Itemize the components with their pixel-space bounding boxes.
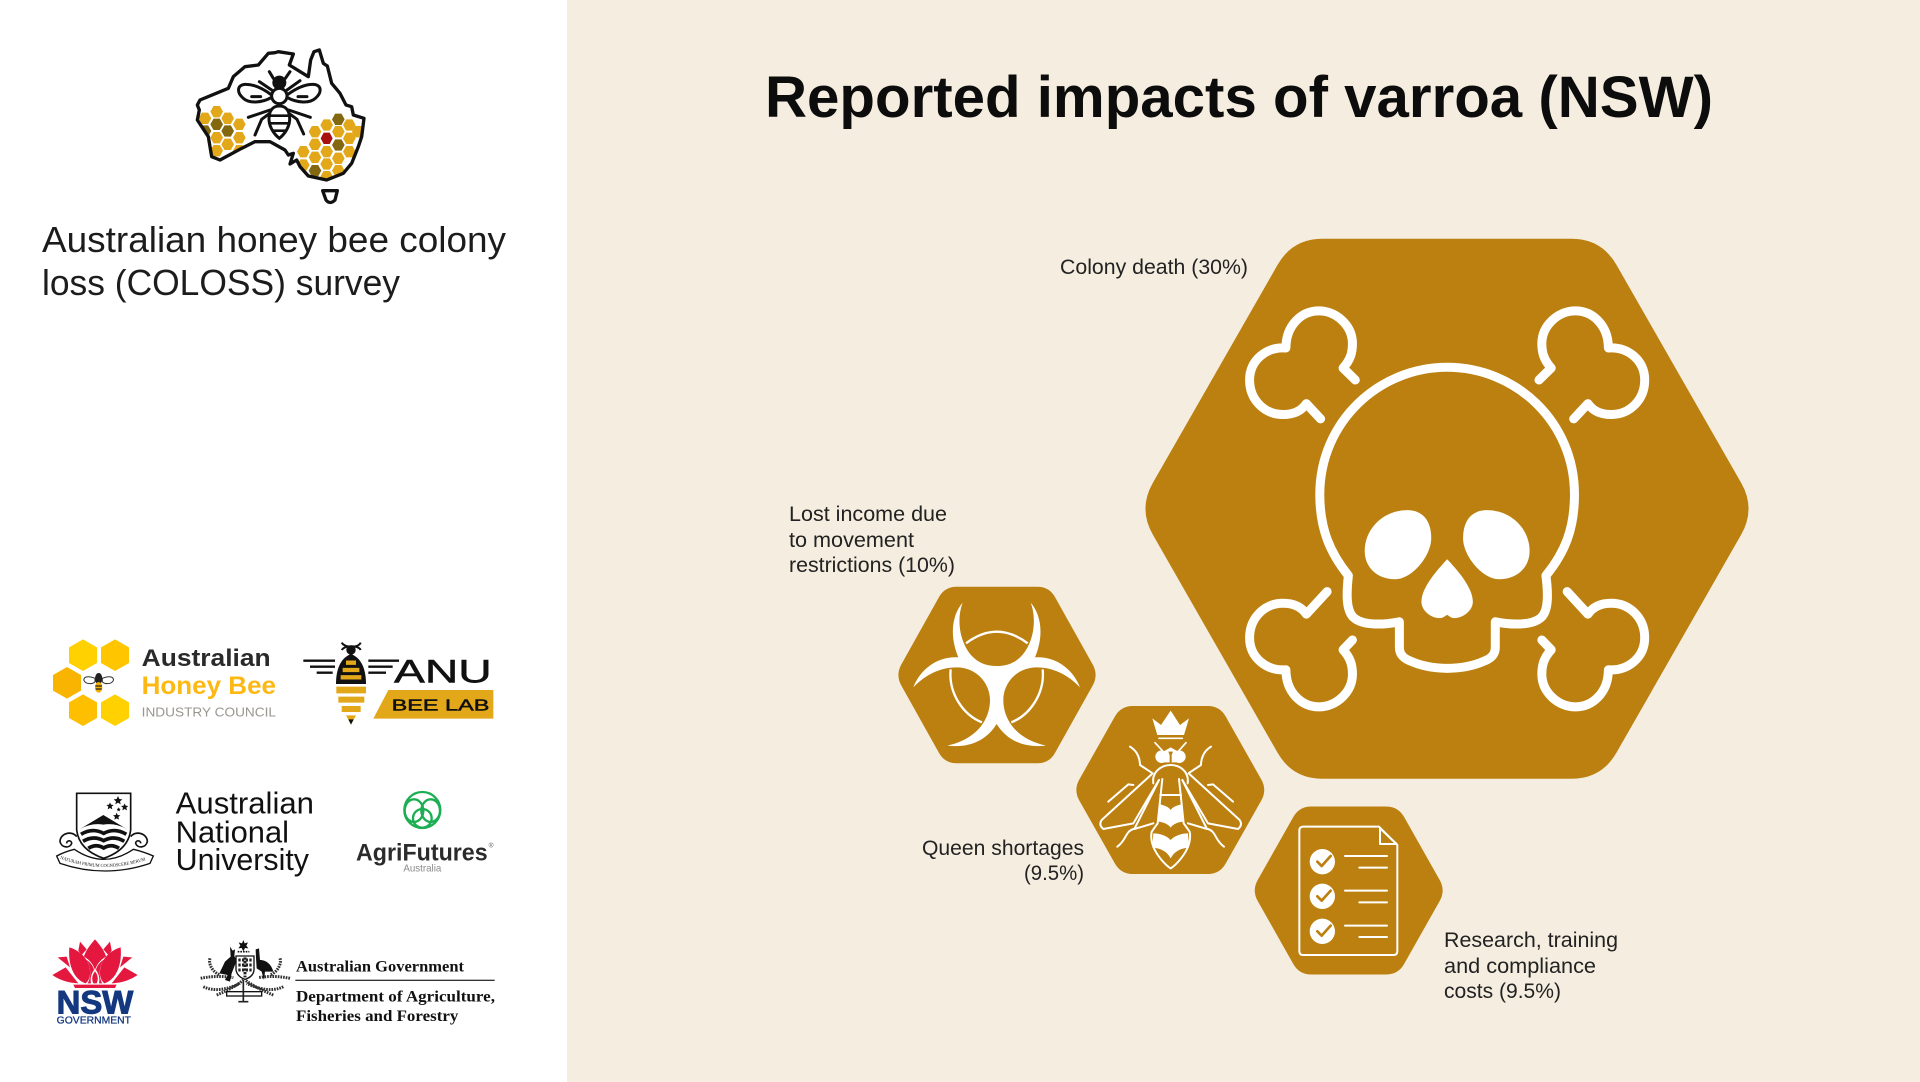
text: department name: Fisheries and Forestry xyxy=(296,1008,458,1025)
logo: Australian Honey Bee Industry Council xyxy=(53,639,276,726)
panel: left sidebar xyxy=(0,0,567,1082)
panel: queen shortages hexagon with queen bee xyxy=(1076,706,1264,874)
label: colony death: Colony death (30%) xyxy=(1060,256,1248,279)
text: department name xyxy=(295,959,495,1025)
icon: ANU crest: NATURAM PRIMUM COGNOSCERE RERUM xyxy=(60,856,146,867)
label: lost income: restrictions (10%) xyxy=(789,554,955,577)
logo: Australian Government Department of Agriculture, Fisheries and Forestry xyxy=(201,940,495,1025)
icon: skull and crossbones xyxy=(1250,311,1645,707)
text: department name: Department of Agriculture, xyxy=(296,989,495,1006)
heading: survey name: loss (COLOSS) survey xyxy=(42,262,400,303)
label: research, training and compliance costs: and compliance xyxy=(1444,955,1596,978)
logo: AgriFutures Australia: AgriFutures xyxy=(356,840,488,867)
label: research, training and compliance costs: Research, training xyxy=(1444,929,1618,952)
label: lost income xyxy=(789,503,955,577)
logo: ANU Bee Lab xyxy=(303,643,493,725)
logo: Australian National University xyxy=(56,786,314,877)
text: university name: Australian xyxy=(176,786,314,820)
text: university name: University xyxy=(176,843,310,877)
icon: Australia map with bee and honeycomb xyxy=(197,50,365,202)
text: NSW Government: GOVERNMENT xyxy=(57,1015,132,1026)
label: queen shortages: (9.5%) xyxy=(1024,862,1084,885)
logo: ANU Bee Lab: BEE LAB xyxy=(392,698,489,715)
icon: crowned queen bee xyxy=(1100,711,1241,868)
heading: survey name: Australian honey bee colony xyxy=(42,219,506,260)
logo: AgriFutures Australia xyxy=(356,792,494,875)
panel: colony death hexagon with skull and crossbones xyxy=(1145,239,1749,779)
label: lost income: to movement xyxy=(789,529,914,552)
panel: research costs hexagon with checklist xyxy=(1255,806,1443,974)
icon: biohazard xyxy=(913,603,1080,746)
label: queen shortages xyxy=(922,837,1084,885)
logo: AgriFutures Australia: Australia xyxy=(403,864,442,875)
text: university name xyxy=(176,786,314,877)
panel: lost income hexagon with biohazard symbol xyxy=(898,587,1096,763)
icon: checklist document xyxy=(1299,827,1397,955)
label: research, training and compliance costs xyxy=(1444,929,1618,1003)
icon: waratah flower xyxy=(52,939,138,988)
title: Reported impacts of varroa (NSW) xyxy=(765,65,1713,130)
text: department name: Australian Government xyxy=(296,959,465,976)
text: NSW Government: NSW xyxy=(57,984,134,1020)
icon: coat of arms xyxy=(201,940,290,1002)
text: university name: National xyxy=(176,815,289,849)
logo: Australian Honey Bee Industry Council: INDUSTRY COUNCIL xyxy=(142,706,276,720)
logo: NSW Government xyxy=(52,939,138,1026)
logo: AgriFutures Australia: ® xyxy=(489,841,494,849)
logo: Australian Honey Bee Industry Council: Australian xyxy=(142,645,271,672)
icon: ANU crest xyxy=(56,792,154,872)
heading: survey name xyxy=(42,219,506,303)
label: lost income: Lost income due xyxy=(789,503,947,526)
logo: ANU Bee Lab: ANU xyxy=(394,654,492,690)
label: research, training and compliance costs: costs (9.5%) xyxy=(1444,980,1561,1003)
logo: Australian Honey Bee Industry Council: Honey Bee xyxy=(142,673,276,700)
label: queen shortages: Queen shortages xyxy=(922,837,1084,860)
